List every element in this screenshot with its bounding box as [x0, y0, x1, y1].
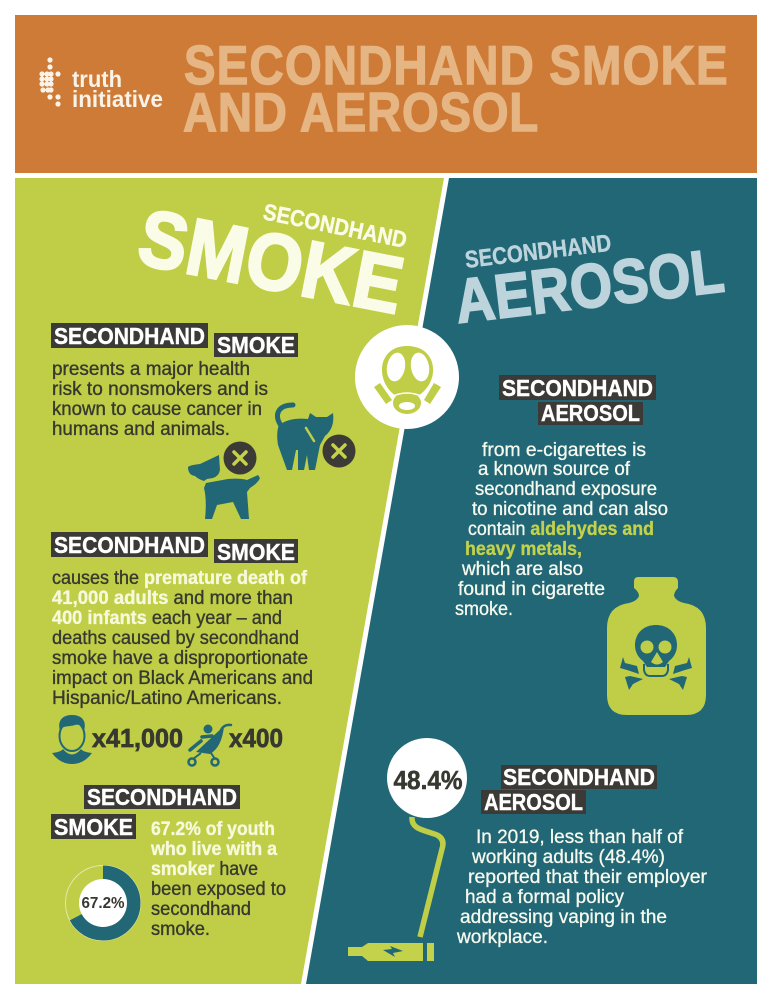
logo: truth initiative — [39, 57, 163, 112]
text: workplace policy: In 2019, less than half of — [476, 827, 684, 848]
label: secondhand smoke: SMOKE — [54, 814, 133, 840]
text: workplace policy — [456, 827, 708, 948]
stat: 48.4% circle — [387, 738, 467, 818]
text: aerosol exposure: to nicotine and can also — [472, 499, 668, 520]
text: premature death — [52, 568, 313, 709]
label: secondhand aerosol — [481, 764, 657, 815]
text: health risk: humans and animals. — [52, 419, 230, 440]
block: youth exposure — [51, 784, 286, 940]
heading: secondhand aerosol: SECONDHAND — [464, 230, 613, 274]
text: youth exposure: secondhand — [151, 899, 251, 920]
title — [183, 35, 728, 143]
text: workplace policy: workplace. — [456, 927, 548, 948]
panel: secondhand smoke background — [15, 178, 447, 984]
text: workplace policy: addressing vaping in the — [460, 907, 667, 928]
label: secondhand smoke: SMOKE — [217, 539, 295, 565]
text: aerosol exposure: from e-cigarettes is — [482, 440, 646, 461]
label: secondhand aerosol: SECONDHAND — [502, 375, 653, 401]
panel: secondhand aerosol background — [303, 178, 757, 984]
icon: poison bottle — [607, 577, 706, 715]
text: premature death: 400 infants each year – and — [52, 608, 282, 629]
heading: secondhand aerosol: AEROSOL — [451, 236, 727, 337]
stat: x41,000: x41,000 — [92, 723, 183, 753]
logo: truth initiative: initiative — [72, 86, 163, 112]
text: workplace policy: working adults (48.4%) — [471, 847, 665, 868]
text: youth exposure: smoker have — [151, 859, 258, 880]
text: aerosol exposure: heavy metals, — [465, 539, 582, 560]
divider — [301, 178, 449, 984]
heading: secondhand smoke: SECONDHAND — [261, 198, 409, 253]
title: SECONDHAND SMOKE — [184, 35, 728, 96]
header banner — [15, 15, 757, 173]
icon: stroller — [188, 724, 231, 766]
icon: vape pen — [348, 943, 434, 961]
text: health risk: risk to nonsmokers and is — [52, 379, 268, 400]
text: health risk: presents a major health — [52, 359, 250, 380]
text: youth exposure: who live with a — [150, 839, 277, 860]
label: secondhand smoke — [51, 532, 298, 565]
text: health risk — [52, 359, 268, 440]
text: youth exposure: been exposed to — [151, 879, 286, 900]
text: aerosol exposure: a known source of — [478, 459, 631, 480]
icon: vape cord — [412, 817, 443, 937]
label: secondhand smoke: SMOKE — [217, 332, 295, 358]
text: premature death: causes the premature death of — [52, 568, 308, 589]
text: premature death: 41,000 adults and more than — [52, 588, 293, 609]
label: secondhand aerosol: AEROSOL — [484, 789, 583, 815]
label: secondhand smoke: SECONDHAND — [54, 323, 205, 349]
heading: secondhand smoke: SMOKE — [132, 193, 410, 331]
stat: 48.4% circle: 48.4% — [394, 765, 462, 795]
text: aerosol exposure: contain aldehydes and — [468, 519, 654, 540]
text: youth exposure: 67.2% of youth — [151, 819, 275, 840]
text: youth exposure: smoke. — [151, 919, 210, 940]
chart: donut 67.2%: 67.2% — [82, 895, 125, 912]
icon: dog with x — [188, 442, 260, 519]
stat: x400: x400 — [229, 723, 283, 753]
block: aerosol exposure — [455, 375, 668, 620]
icon: gas mask — [355, 325, 459, 429]
text: youth exposure — [150, 819, 286, 940]
chart: donut 67.2% — [66, 866, 140, 940]
text: aerosol exposure: smoke. — [455, 599, 513, 620]
block: smoke health risk — [51, 323, 298, 440]
label: secondhand aerosol — [499, 375, 656, 426]
label: secondhand smoke — [51, 784, 240, 840]
text: premature death: Hispanic/Latino Americans. — [52, 688, 282, 709]
text: premature death: smoke have a disproportionate — [52, 648, 308, 669]
text: health risk: known to cause cancer in — [52, 399, 262, 420]
text: aerosol exposure: found in cigarette — [458, 579, 605, 600]
label: secondhand aerosol: AEROSOL — [541, 400, 640, 426]
text: premature death: impact on Black Americans and — [52, 668, 313, 689]
label: secondhand smoke: SECONDHAND — [54, 532, 205, 558]
block: workplace policy — [456, 764, 708, 948]
text: workplace policy: had a formal policy — [465, 887, 624, 908]
icon: cat with x — [277, 405, 356, 470]
text: aerosol exposure: which are also — [461, 559, 583, 580]
label: secondhand smoke — [51, 323, 298, 358]
title: AND AEROSOL — [183, 82, 538, 143]
label: secondhand aerosol: SECONDHAND — [503, 764, 655, 790]
icon: adult — [52, 715, 92, 764]
logo: truth initiative: truth — [72, 66, 122, 92]
text: premature death: deaths caused by secondhand — [52, 628, 299, 649]
label: secondhand smoke: SECONDHAND — [87, 784, 237, 810]
text: aerosol exposure: secondhand exposure — [475, 479, 657, 500]
text: aerosol exposure — [455, 440, 668, 620]
block: smoke premature death — [51, 532, 313, 709]
text: workplace policy: reported that their employer — [468, 867, 708, 888]
